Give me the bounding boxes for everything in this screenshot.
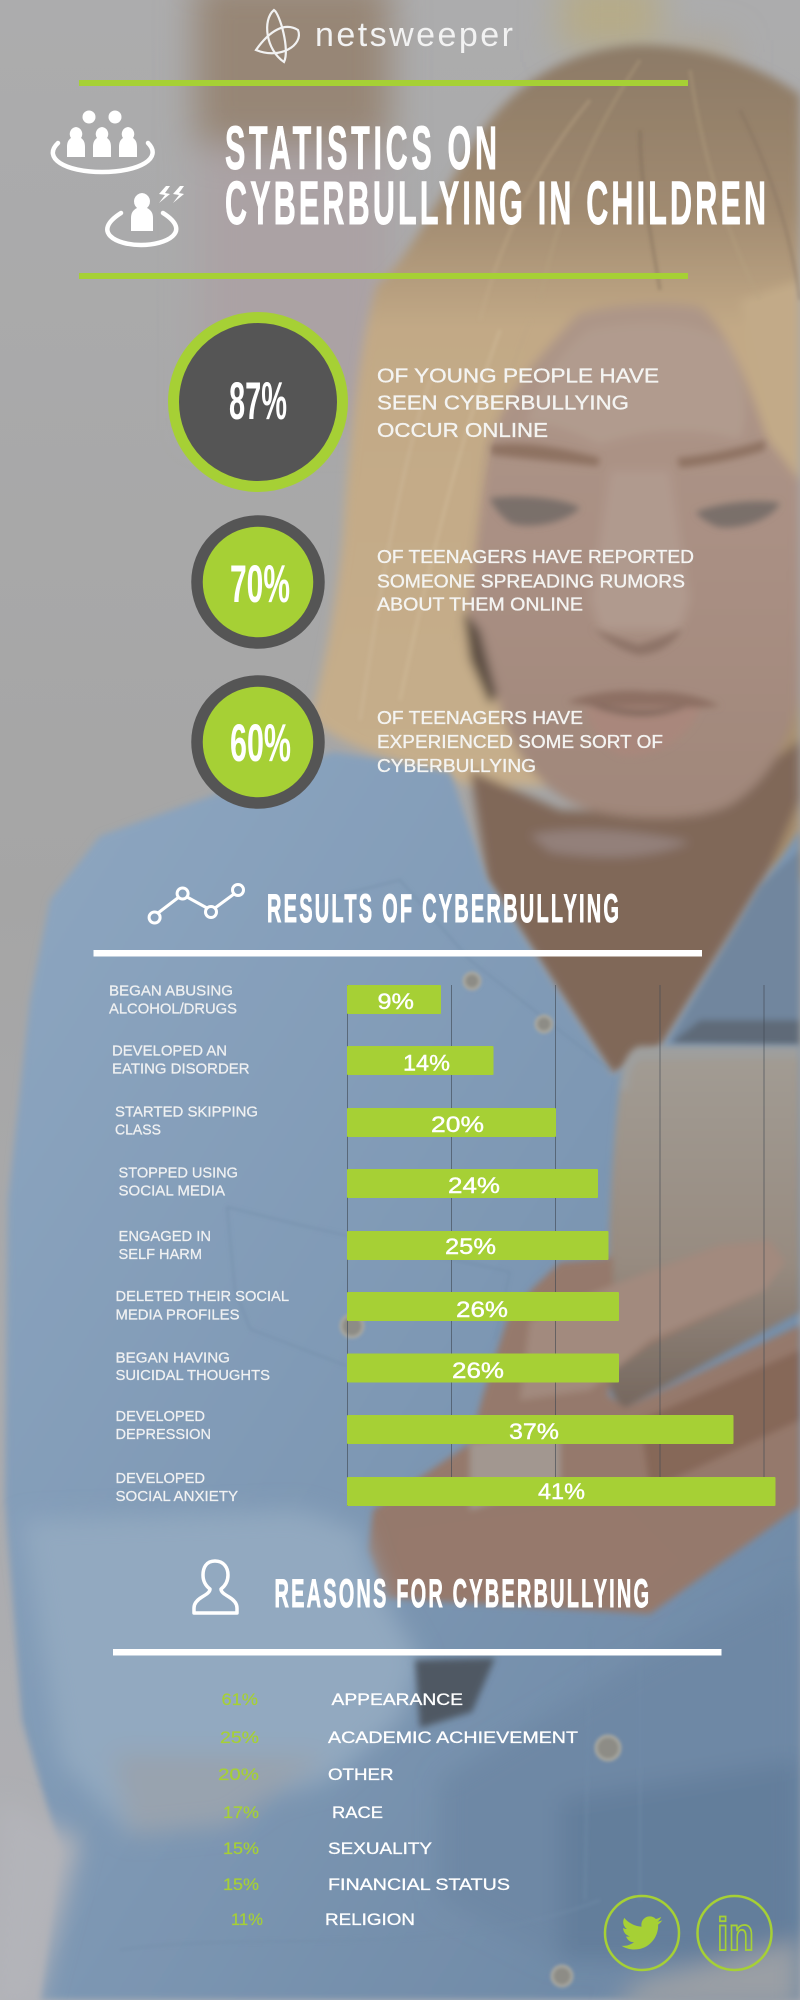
reason: other: OTHER [328, 1765, 394, 1784]
bar: deleted profiles: 26% [456, 1297, 508, 1322]
white rule under reasons heading [113, 1649, 722, 1656]
shirt seams [120, 880, 640, 1950]
bar: suicidal thoughts: SUICIDAL THOUGHTS [116, 1368, 270, 1384]
icon: line chart [149, 884, 244, 923]
value 87%: 87% [229, 372, 287, 431]
reason: sexuality: 15% [223, 1839, 259, 1858]
title [225, 115, 766, 238]
reason: appearance: APPEARANCE [332, 1690, 463, 1709]
reason: financial status: 15% [223, 1875, 259, 1894]
bar: social anxiety [116, 1471, 776, 1506]
bar: self harm: SELF HARM [118, 1247, 202, 1263]
bar: skipping class: CLASS [115, 1122, 161, 1138]
reason: other: 20% [218, 1765, 259, 1784]
bar: social anxiety: SOCIAL ANXIETY [116, 1489, 238, 1505]
bar: depression: 37% [509, 1419, 559, 1444]
phone [608, 1046, 800, 1408]
reason: financial status [223, 1875, 510, 1894]
stat: 70% [197, 521, 694, 643]
logo: netsweeper [256, 10, 513, 62]
reason: appearance [222, 1690, 463, 1709]
bar: social anxiety: DEVELOPED [116, 1471, 205, 1487]
description 60% [377, 708, 663, 776]
bar: skipping class: 20% [431, 1112, 484, 1137]
inner cuff shadow [415, 1658, 495, 1728]
description 60%: OF TEENAGERS HAVE [377, 708, 583, 728]
title line 2: CYBERBULLYING IN CHILDREN [225, 170, 766, 238]
reason: race: 17% [223, 1803, 259, 1822]
eyes, brows, nose and lips [490, 496, 580, 526]
description 87% [377, 366, 659, 442]
icon: linkedin [698, 1896, 772, 1970]
bar: skipping class: STARTED SKIPPING [115, 1105, 258, 1121]
reason: religion [231, 1910, 415, 1929]
bottom green rule [79, 273, 688, 279]
list: reasons [218, 1690, 578, 1929]
description 70%: SOMEONE SPREADING RUMORS [377, 572, 685, 592]
icon: person outline [194, 1561, 237, 1613]
white rule under results heading [94, 950, 702, 956]
reason: academic achievement: 25% [220, 1728, 259, 1747]
logo swirl [256, 10, 299, 62]
description 87%: SEEN CYBERBULLYING [377, 392, 629, 414]
description 70%: OF TEENAGERS HAVE REPORTED [377, 547, 694, 567]
bar: alcohol/drugs: BEGAN ABUSING [109, 984, 233, 1000]
reason: academic achievement [220, 1728, 578, 1747]
bar: alcohol/drugs [109, 984, 441, 1018]
circle badge 60% [197, 681, 319, 803]
icon: group of people in a circle [53, 110, 153, 172]
bar: alcohol/drugs: ALCOHOL/DRUGS [109, 1002, 237, 1018]
description 70%: ABOUT THEM ONLINE [377, 594, 583, 614]
logo wordmark: netsweeper [315, 16, 513, 54]
bar: depression: DEPRESSION [116, 1427, 211, 1443]
top green rule [79, 80, 688, 86]
bar: stopped social media: SOCIAL MEDIA [118, 1184, 225, 1200]
bar: self harm [118, 1229, 608, 1263]
shadow under chin on hair [463, 610, 497, 705]
icon: single person with stress marks [107, 186, 184, 245]
bar: suicidal thoughts [116, 1350, 619, 1384]
value 60%: 60% [230, 714, 291, 773]
reason: appearance: 61% [222, 1690, 258, 1709]
icon: twitter [605, 1896, 679, 1970]
title line 1: STATISTICS ON [225, 115, 497, 183]
snaps [341, 973, 620, 1986]
reason: race: RACE [332, 1803, 383, 1822]
circle badge 70% [197, 521, 319, 643]
bar: self harm: ENGAGED IN [118, 1229, 211, 1245]
bar: depression: DEVELOPED [116, 1409, 205, 1425]
lower right denim [440, 1580, 800, 1960]
bar: suicidal thoughts: 26% [452, 1358, 504, 1383]
sleeve and cuff [22, 1510, 420, 1835]
reason: religion: 11% [231, 1910, 263, 1929]
reason: academic achievement: ACADEMIC ACHIEVEMENT [328, 1728, 578, 1747]
denim body [5, 752, 800, 2000]
description 87%: OF YOUNG PEOPLE HAVE [377, 366, 659, 388]
reason: religion: RELIGION [325, 1910, 415, 1929]
bar: self harm: 25% [445, 1234, 496, 1259]
bar: stopped social media: 24% [448, 1173, 500, 1198]
value 70%: 70% [230, 555, 290, 614]
bar: depression [116, 1409, 734, 1444]
right hair and lower right hair [740, 280, 800, 500]
bar chart: results [109, 984, 776, 1506]
description 87%: OCCUR ONLINE [377, 420, 548, 442]
heading: reasons for cyberbullying: REASONS FOR CYBERBULLYING [274, 1570, 649, 1616]
bar: deleted profiles [116, 1289, 619, 1324]
hand and wrist [368, 1240, 800, 1614]
bottom light area [0, 1800, 80, 2000]
hair [312, 45, 800, 790]
description 60%: CYBERBULLYING [377, 756, 536, 776]
reason: financial status: FINANCIAL STATUS [328, 1875, 510, 1894]
bar: skipping class [115, 1105, 556, 1138]
bar: suicidal thoughts: BEGAN HAVING [116, 1350, 230, 1366]
circle badge 87% [174, 318, 342, 486]
bar: stopped social media: STOPPED USING [118, 1166, 238, 1182]
bar: eating disorder: EATING DISORDER [112, 1062, 250, 1078]
bar: eating disorder: DEVELOPED AN [112, 1044, 227, 1060]
stat: 87% [174, 318, 659, 486]
reason: sexuality [223, 1839, 432, 1858]
reason: race [223, 1803, 383, 1822]
bar: social anxiety: 41% [538, 1479, 585, 1504]
bar: stopped social media [118, 1166, 598, 1200]
description 70% [377, 547, 694, 614]
reason: sexuality: SEXUALITY [328, 1839, 432, 1858]
face [467, 304, 800, 818]
heading: results of cyberbullying: RESULTS OF CYBERBULLYING [267, 885, 619, 931]
bar: deleted profiles: DELETED THEIR SOCIAL [116, 1289, 289, 1305]
bar: eating disorder: 14% [403, 1050, 450, 1076]
hair streaks [360, 60, 800, 720]
bar: alcohol/drugs: 9% [378, 989, 414, 1014]
dark collar right [670, 850, 800, 1045]
icon: linkedin: in [717, 1908, 754, 1960]
reason: other [218, 1765, 394, 1784]
stat: 60% [197, 681, 663, 803]
description 60%: EXPERIENCED SOME SORT OF [377, 732, 663, 752]
bar: deleted profiles: MEDIA PROFILES [116, 1308, 240, 1324]
neck [470, 740, 800, 1075]
bar: eating disorder [112, 1044, 494, 1078]
